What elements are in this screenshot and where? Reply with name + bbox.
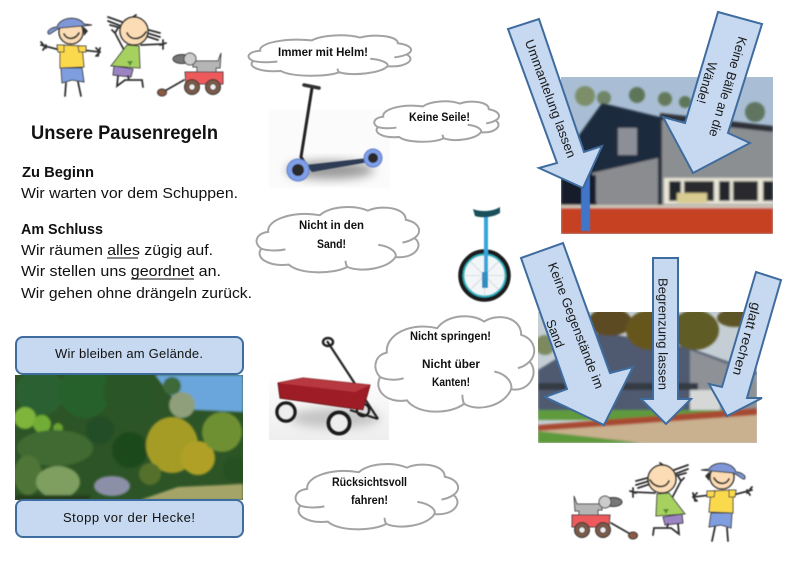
text block: end rules [21,221,252,302]
text block: end rules: Wir stellen uns geordnet an. [21,263,221,280]
arrow: no objects in the sand: Sand [543,317,567,350]
speech cloud: helmet: Immer mit Helm! [278,45,368,59]
speech cloud: not in the sand: Nicht in den [299,218,364,232]
arrow: rake smooth: glatt rechen [730,301,764,377]
text block: end rules: Wir räumen alles zügig auf. [21,242,213,259]
speech cloud: no ropes: Keine Seile! [409,110,470,124]
arrow: rake smooth [709,272,781,416]
speech cloud: helmet [249,35,411,76]
speech cloud: no ropes [374,101,499,142]
photo: garden hedge [14,366,249,500]
title: Unsere Pausenregeln [31,123,218,144]
text block: beginning rules [21,164,238,202]
arrow: keep padding [508,19,602,188]
speech cloud: no jumping: Nicht über [422,357,480,371]
photo: sand pit and hall [535,308,757,443]
arrow: no objects in the sand: Keine Gegenstände im [545,260,607,391]
label box: stay on the grounds: Wir bleiben am Gelände. [55,346,203,361]
photo: sports hall with basketball post [561,77,773,234]
text block: beginning rules: Zu Beginn [22,164,94,181]
label box: stop at the hedge [16,500,243,537]
text block: end rules: Wir gehen ohne drängeln zurück. [21,285,252,302]
text block: end rules: Am Schluss [21,221,103,238]
label box: stop at the hedge: Stopp vor der Hecke! [63,510,195,525]
photo: scooter [269,85,390,188]
speech cloud: not in the sand [257,207,419,272]
arrow: keep padding: Ummantelung lassen [522,37,579,160]
speech cloud: ride considerately: Rücksichtsvoll [332,475,407,489]
arrow: no balls against the walls: Wände! [693,60,720,105]
speech cloud: not in the sand: Sand! [317,237,346,251]
speech cloud: ride considerately: fahren! [351,493,388,507]
arrow: no objects in the sand [521,243,633,425]
speech cloud: ride considerately [296,464,458,529]
text block: beginning rules: Wir warten vor dem Schuppen. [21,185,238,202]
label box: stay on the grounds [16,337,243,374]
arrow: no balls against the walls [663,12,762,173]
arrow: keep the boundary: Begrenzung lassen [656,278,670,390]
illustration: children and dog with wagon, bottom [572,463,752,541]
photo: red wagon [269,338,389,440]
illustration: children and dog with wagon, top [41,15,223,96]
arrow: keep the boundary [641,258,691,424]
speech cloud: no jumping [375,316,534,412]
arrow: no balls against the walls: Keine Bälle an die [706,35,750,139]
speech cloud: no jumping: Nicht springen! [410,329,491,343]
photo: unicycle [460,207,508,300]
speech cloud: no jumping: Kanten! [432,375,470,389]
